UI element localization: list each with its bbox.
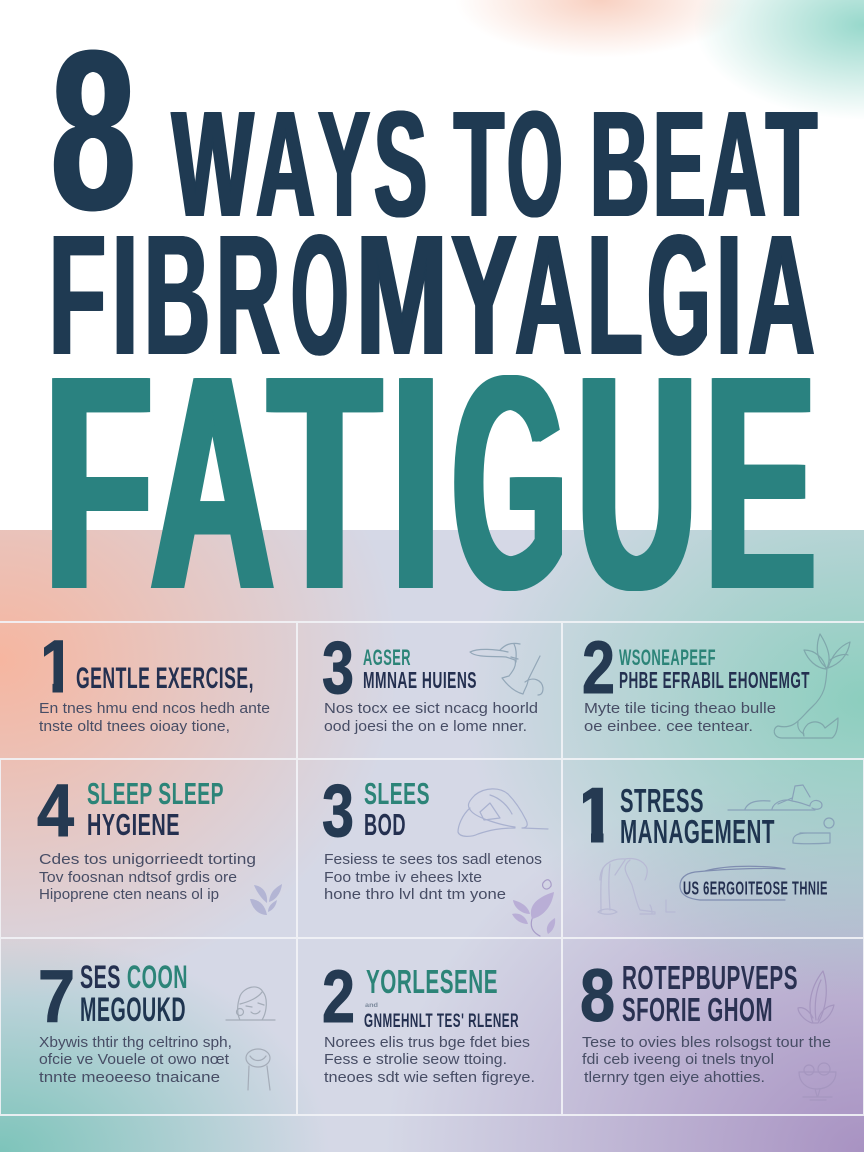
panel 5: slees bod (322, 769, 556, 936)
icon: bending figure (598, 859, 675, 914)
panel 6: stress management (583, 782, 834, 915)
icon: leaves (798, 971, 834, 1023)
title numeral 8: 8 (51, 4, 135, 258)
title line: ways to beat: T (766, 79, 816, 248)
title line: fatigue: I (392, 312, 439, 653)
title line: fibromyalgia (49, 200, 815, 391)
title line: ways to beat: A (256, 79, 315, 248)
title line: fibromyalgia: O (291, 200, 349, 391)
heading (622, 959, 798, 1028)
body text: ood joesi the on e lome nner. (324, 719, 527, 735)
heading: STRESS (620, 782, 704, 819)
title line: fibromyalgia: B (144, 200, 210, 391)
body text: tlernry tgen eiye ahotties. (584, 1070, 765, 1086)
heading: SLEEP SLEEP (87, 776, 224, 811)
body text (324, 1035, 535, 1086)
title line: fibromyalgia: R (216, 200, 280, 391)
body text: Tov foosnan ndtsof grdis ore (39, 870, 237, 886)
panel 3: top right (582, 626, 850, 739)
title line: ways to beat: B (590, 79, 650, 248)
panel 8: yorlesene (322, 955, 535, 1086)
title line: fatigue: E (705, 312, 815, 653)
icon: bowl (799, 1063, 836, 1100)
title line: fibromyalgia: I (716, 200, 742, 391)
icon: stretching figure (470, 643, 543, 695)
icon: reclining figure (793, 818, 834, 844)
title line: fibromyalgia: F (49, 200, 106, 391)
title line: fibromyalgia: M (356, 200, 447, 391)
heading: SFORIE GHOM (622, 991, 773, 1028)
heading: MANAGEMENT (620, 813, 775, 850)
body text: ofcie ve Vouele ot owo nœt (39, 1052, 229, 1068)
heading (363, 645, 477, 693)
heading (620, 782, 775, 850)
panel 2: agser (322, 626, 544, 735)
body text: oe einbee. cee tentear. (584, 719, 753, 735)
title line: fibromyalgia: A (515, 200, 582, 391)
panel 4: sleep hygiene (37, 769, 282, 915)
heading: WSONEAPEEF (619, 645, 716, 670)
number 1: 1 (574, 771, 617, 859)
title line: ways to beat: W (172, 79, 254, 248)
title line: fibromyalgia: Y (451, 200, 516, 391)
heading: MEGOUKD (80, 991, 186, 1029)
body text (324, 701, 538, 735)
body text (582, 1035, 831, 1086)
heading: GENTLE EXERCISE, (76, 662, 254, 695)
heading: AGSER (363, 645, 411, 670)
body text: tneoes sdt wie seften figreye. (324, 1070, 535, 1086)
title line: ways to beat: O (507, 79, 563, 248)
body text: Nos tocx ee sict ncacg hoorld (324, 701, 538, 717)
title line: fibromyalgia: L (587, 200, 643, 391)
icon: face (226, 987, 275, 1020)
title line: ways to beat: A (708, 79, 766, 248)
number 4: 4 (37, 769, 74, 852)
body text (39, 1035, 232, 1086)
icon: plant and figure (774, 634, 850, 738)
body text: En tnes hmu end ncos hedh ante (39, 701, 270, 717)
heading (364, 963, 519, 1032)
body text: Hipoprene cten neans ol ip (39, 887, 219, 903)
title line: fatigue: A (151, 312, 274, 653)
title line: fatigue: T (269, 312, 381, 653)
heading (619, 645, 810, 693)
body text: Foo tmbe iv ehees lxte (324, 870, 482, 886)
title line: fibromyalgia: A (748, 200, 815, 391)
body text: Fess e strolie seow ttoing. (324, 1052, 507, 1068)
number 3: 3 (322, 626, 354, 709)
badge text with oval (680, 866, 828, 900)
heading (80, 959, 188, 1029)
title line: fibromyalgia: G (647, 200, 711, 391)
icon: leaf (250, 884, 282, 915)
heading: SES COON (80, 959, 188, 995)
number 3: 3 (322, 769, 354, 852)
body text: Cdes tos unigorrieedt torting (39, 852, 256, 868)
heading: GNMEHNLT TES' RLENER (364, 1011, 519, 1032)
number 2: 2 (322, 955, 355, 1038)
title line: ways to beat: T (454, 79, 503, 248)
number 8: 8 (580, 954, 615, 1037)
title line: ways to beat: E (653, 79, 705, 248)
body text: hone thro lvl dnt tm yone (324, 887, 506, 903)
number 2: 2 (582, 626, 615, 709)
panel 7: ses coon (38, 955, 276, 1090)
title line: fatigue: F (45, 312, 152, 653)
title line: fatigue (45, 312, 815, 653)
body text (39, 852, 256, 903)
body text (324, 852, 542, 903)
heading: YORLESENE (366, 963, 498, 1000)
title line: fatigue: G (452, 312, 568, 653)
heading (364, 776, 430, 842)
body text: Fesiess te sees tos sadl etenos (324, 852, 542, 868)
body text: fdi ceb iveeng oi tnels tnyol (582, 1052, 774, 1068)
title line: ways to beat: Y (318, 79, 370, 248)
title line: fatigue: U (577, 312, 697, 653)
icon: resting figure (728, 785, 822, 810)
panel 1: gentle exercise (39, 640, 270, 735)
title line: fibromyalgia: I (112, 200, 138, 391)
icon: curled figure (458, 789, 548, 836)
heading: SLEES (364, 776, 430, 811)
body text: tnste oltd tnees oioay tione, (39, 719, 230, 735)
body text (39, 701, 270, 735)
heading: BOD (364, 807, 406, 842)
heading: MMNAE HUIENS (363, 667, 477, 693)
heading: HYGIENE (87, 807, 180, 842)
number 1: 1 (38, 625, 76, 708)
panel 9: rotepbupveps (580, 954, 836, 1100)
body text: tnnte meoeeso tnaicane (39, 1070, 220, 1086)
body text: Norees elis trus bge fdet bies (324, 1035, 530, 1051)
icon: stool (246, 1049, 270, 1090)
title line: ways to beat: S (374, 79, 426, 248)
body text: Xbywis thtir thg celtrino sph, (39, 1035, 232, 1051)
body text: Myte tile ticing theao bulle (584, 701, 776, 717)
number 7: 7 (38, 955, 75, 1038)
heading: and (365, 1003, 378, 1009)
heading (87, 776, 224, 842)
body text: Tese to ovies bles rolsogst tour the (582, 1035, 831, 1051)
icon: flower (512, 880, 555, 936)
body text (584, 701, 776, 735)
title line: ways to beat (170, 79, 818, 248)
